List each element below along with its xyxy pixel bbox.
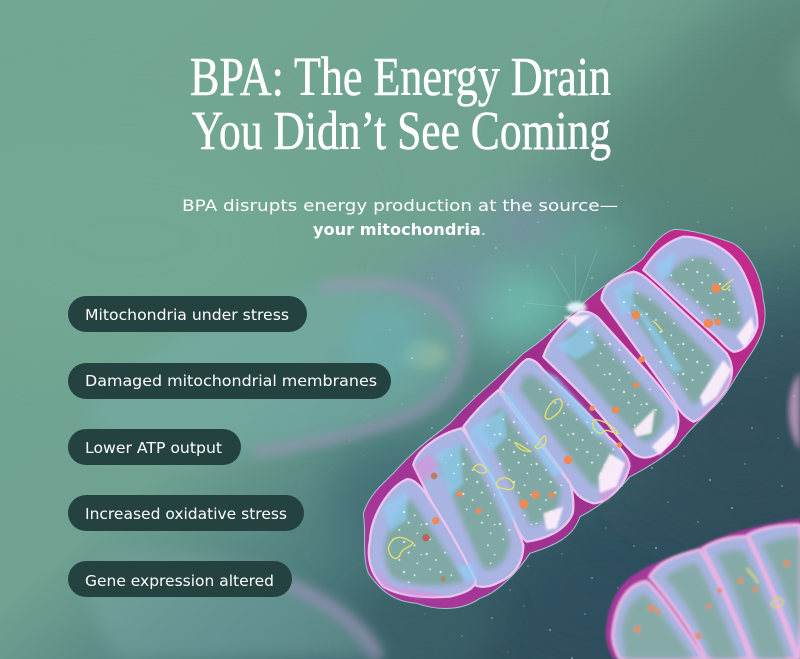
subtitle	[182, 196, 618, 239]
cristae lobes	[369, 237, 757, 597]
flare rays	[525, 250, 597, 308]
pink lobe edge shading	[373, 367, 730, 598]
yellow squiggles	[388, 279, 733, 558]
blurred background mitochondrion, right edge	[789, 372, 800, 450]
pill: mitochondria under stress	[68, 296, 307, 332]
iridescent blue highlights	[383, 252, 683, 582]
subtitle: BPA disrupts energy production at the source—	[182, 196, 618, 215]
pill: increased oxidative stress	[68, 495, 304, 531]
mitochondrion, bottom right	[606, 518, 800, 659]
matrix granules	[387, 250, 743, 583]
orange particles	[422, 284, 721, 582]
lobe interior tint	[385, 257, 743, 586]
title: You Didn’t See Coming	[192, 100, 611, 161]
effects list	[68, 296, 391, 597]
pill: lower ATP output	[68, 429, 241, 465]
pill: increased oxidative stress: Increased oxidative stress	[85, 505, 287, 523]
pill: mitochondria under stress: Mitochondria under stress	[85, 306, 289, 324]
blurred background mitochondrion, left	[90, 281, 465, 462]
pill: damaged mitochondrial membranes: Damaged mitochondrial membranes	[85, 372, 377, 390]
pill: damaged mitochondrial membranes	[68, 363, 391, 399]
outer membrane	[363, 229, 765, 609]
blurred background mitochondrion, bottom left	[87, 552, 385, 659]
lens flare	[567, 302, 587, 313]
main mitochondrion	[363, 229, 765, 609]
title	[190, 46, 611, 161]
subtitle: your mitochondria.	[313, 220, 486, 239]
bright pink-white highlights	[543, 315, 755, 530]
floating particles	[320, 180, 800, 659]
pill: gene expression altered	[68, 561, 292, 597]
pill: gene expression altered: Gene expression altered	[85, 572, 274, 590]
blurred blob, top right	[786, 39, 800, 111]
pill: lower ATP output: Lower ATP output	[85, 439, 222, 457]
title: BPA: The Energy Drain	[190, 46, 611, 107]
